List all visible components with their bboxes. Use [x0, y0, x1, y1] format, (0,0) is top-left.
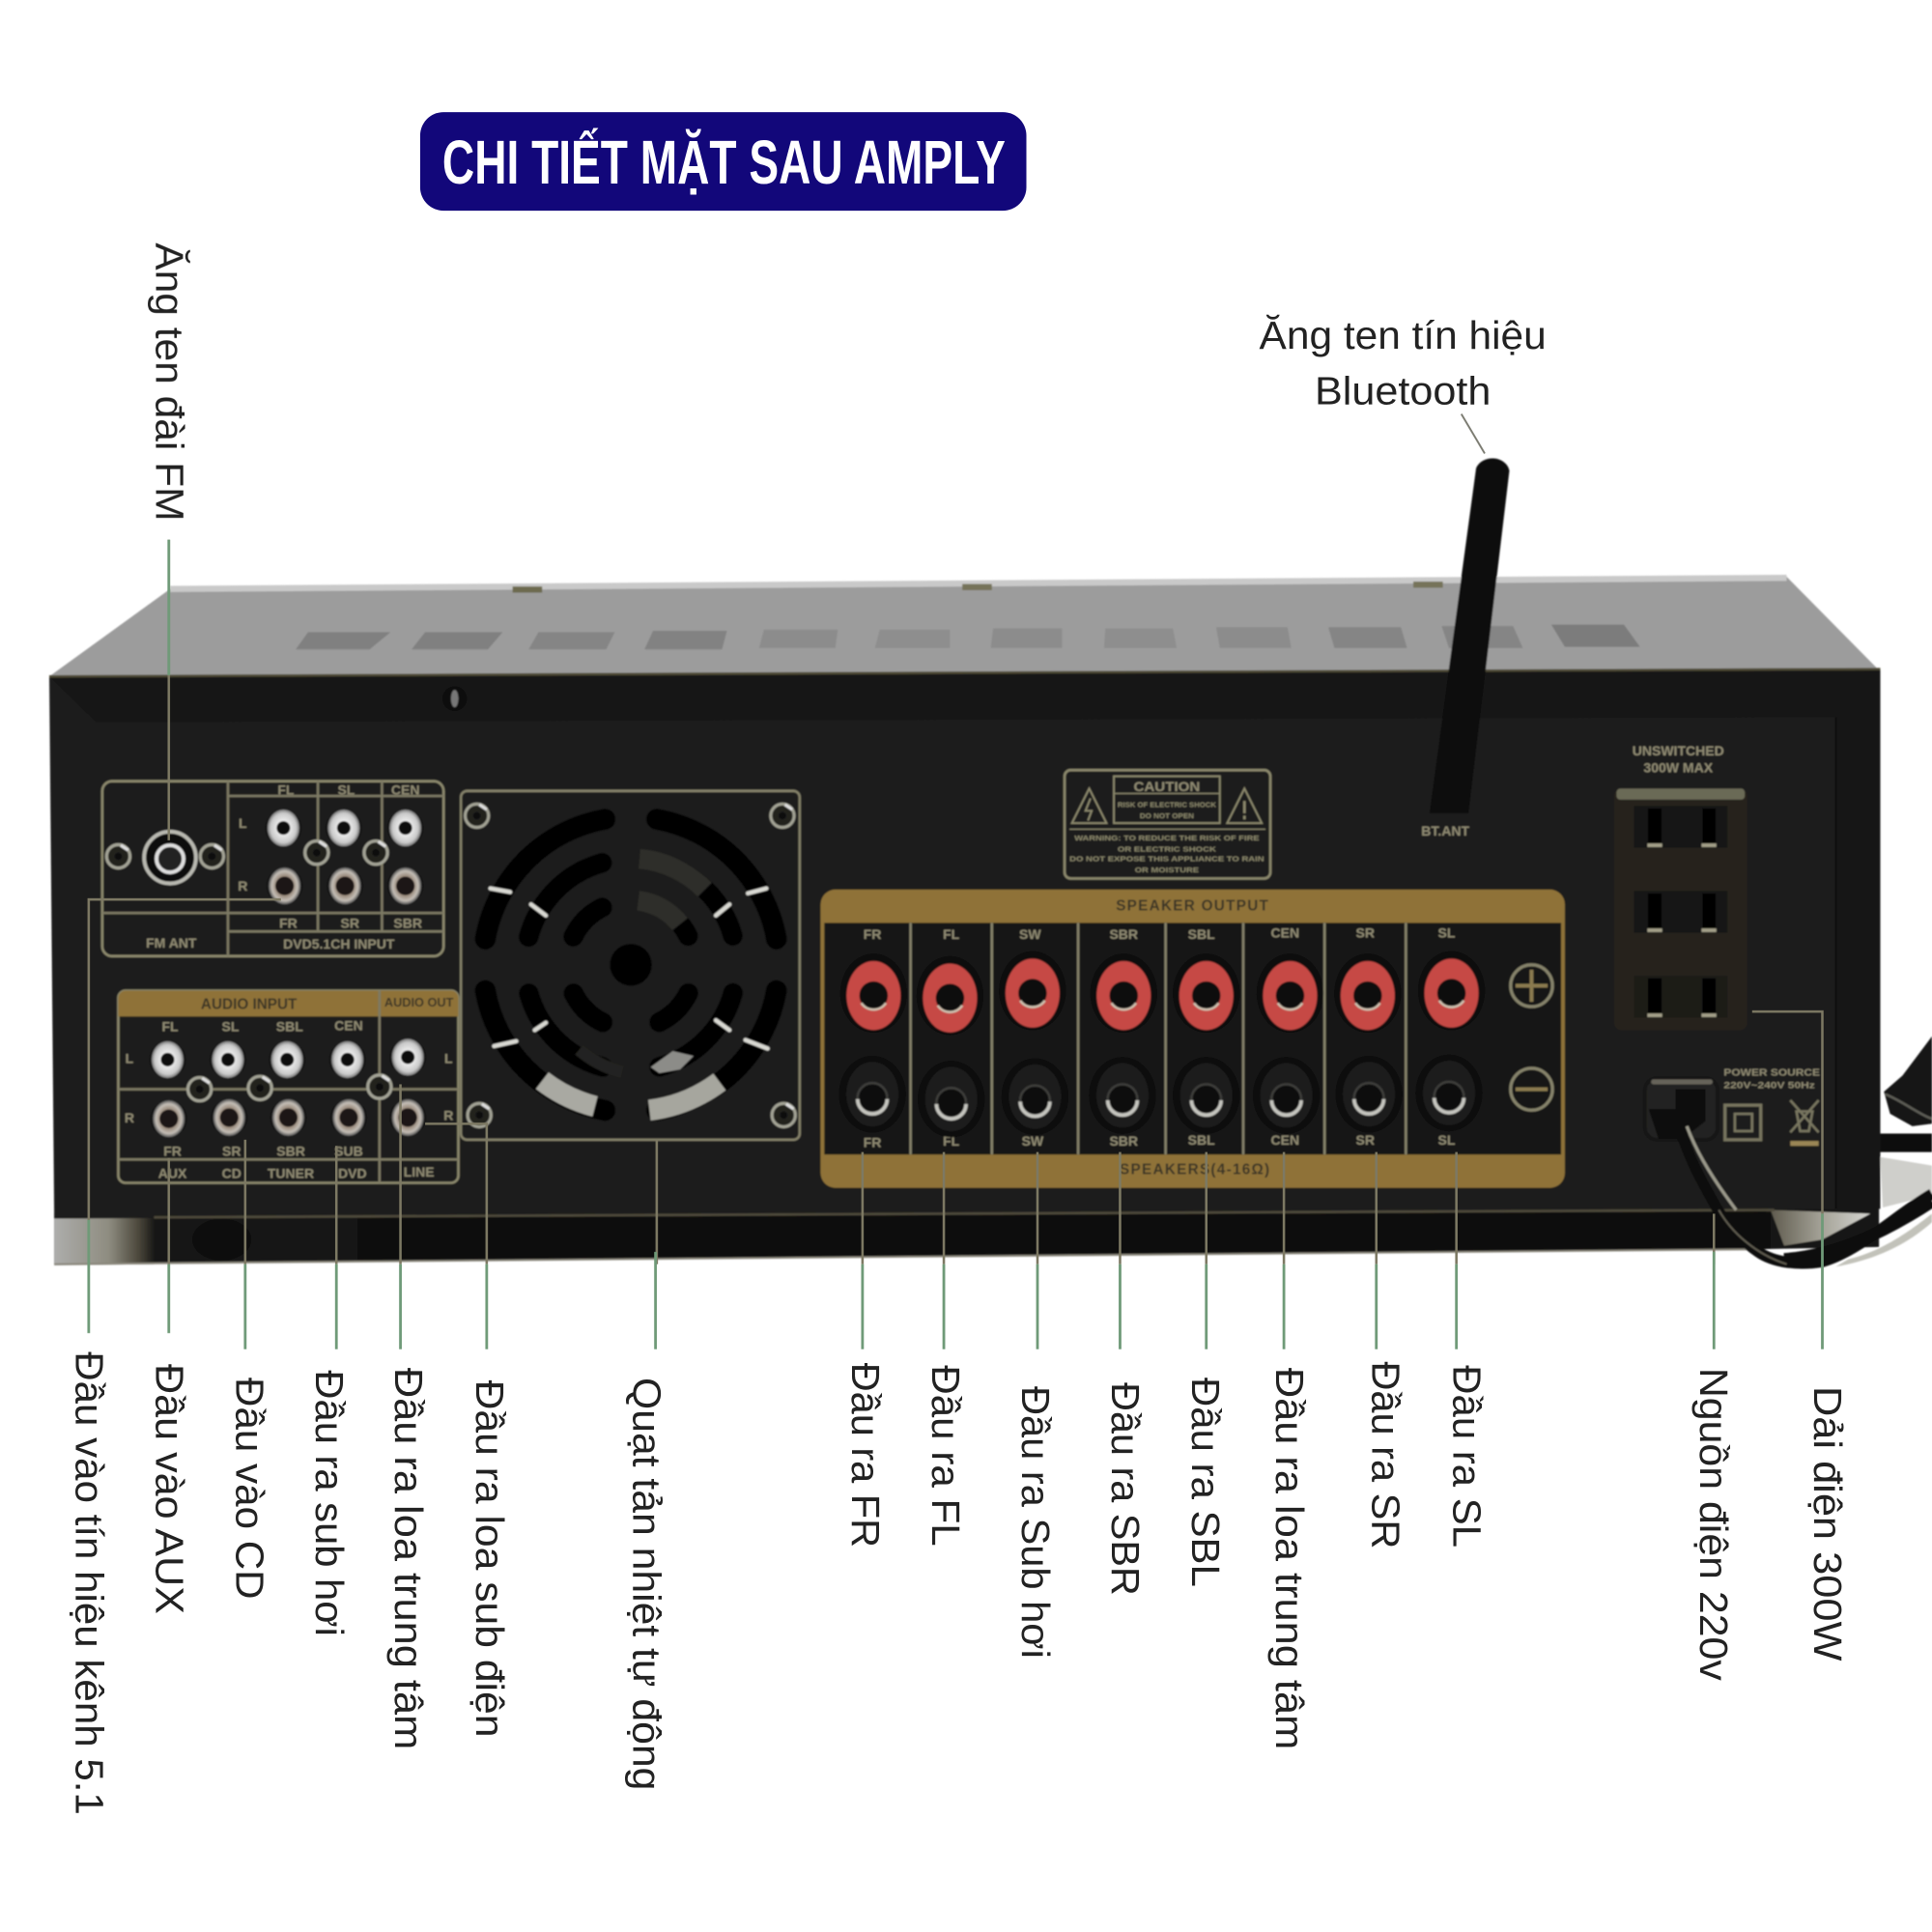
label: AUX input: Đầu vào AUX	[147, 1364, 191, 1614]
panel: DVD 5.1 input and FM antenna	[102, 781, 443, 956]
Bluetooth antenna	[1421, 458, 1509, 838]
icon: plus terminal	[1511, 965, 1552, 1007]
Bluetooth antenna: BT.ANT	[1421, 823, 1470, 838]
panel: speaker output: SBR	[1109, 926, 1138, 942]
panel: speaker output: SPEAKERS(4-16Ω)	[1120, 1162, 1270, 1179]
leader lines	[89, 414, 1822, 1350]
label: Bluetooth antenna	[1260, 313, 1547, 412]
panel: DVD 5.1 input and FM antenna: FL	[277, 782, 295, 798]
label: FM antenna: Ăng ten đài FM	[147, 242, 191, 522]
power inlet and markings: POWER SOURCE	[1723, 1068, 1820, 1079]
unswitched power strip	[1614, 743, 1747, 1030]
panel: speaker output: SW	[1022, 1133, 1044, 1149]
panel: audio input and audio out: DVD	[338, 1165, 367, 1180]
caution label: DO NOT EXPOSE THIS APPLIANCE TO RAIN	[1069, 857, 1264, 864]
panel: speaker output: SPEAKER OUTPUT	[1116, 898, 1269, 915]
panel: speaker output: SBR	[1109, 1133, 1138, 1149]
power inlet and markings	[1645, 1068, 1820, 1146]
label: powered sub output: Đầu ra loa sub điện	[468, 1380, 512, 1737]
label: Sub: Đầu ra Sub hơi	[1013, 1386, 1058, 1659]
panel: audio input and audio out: LINE	[404, 1164, 435, 1179]
panel: DVD 5.1 input and FM antenna: SR	[341, 915, 359, 930]
label: center output: Đầu ra loa trung tâm	[386, 1368, 431, 1749]
title badge: CHI TIẾT MẶT SAU AMPLY	[442, 128, 1006, 197]
panel: DVD 5.1 input and FM antenna: R	[238, 878, 247, 894]
panel: audio input and audio out: AUX	[158, 1165, 187, 1180]
panel: DVD 5.1 input and FM antenna: SL	[337, 782, 355, 798]
panel: speaker output: SR	[1356, 925, 1375, 941]
panel: speaker output: FL	[943, 926, 960, 942]
panel: speaker output: SR	[1356, 1132, 1375, 1148]
panel: speaker output: SBL	[1188, 1132, 1215, 1148]
panel: audio input and audio out: SBL	[276, 1019, 303, 1035]
panel: speaker output: SBL	[1188, 926, 1215, 942]
caution label: WARNING: TO REDUCE THE RISK OF FIRE	[1074, 836, 1260, 842]
panel: audio input and audio out: SL	[222, 1019, 240, 1035]
panel: DVD 5.1 input and FM antenna: SBR	[393, 915, 422, 930]
case screw	[442, 686, 467, 711]
panel: audio input and audio out: AUDIO OUT	[384, 995, 454, 1009]
panel: speaker output: SL	[1437, 1132, 1456, 1148]
amplifier rear panel	[49, 669, 1880, 1218]
panel: speaker output: FR	[864, 926, 881, 942]
panel: speaker output: CEN	[1271, 925, 1299, 941]
panel: audio input and audio out	[118, 991, 458, 1182]
label: center speaker: Đầu ra loa trung tâm	[1267, 1368, 1312, 1749]
power cord	[1678, 1037, 1932, 1266]
panel: audio input and audio out: L	[444, 1051, 453, 1066]
panel: speaker output: SL	[1437, 925, 1456, 941]
amplifier top cover	[49, 577, 1880, 676]
label: SR: Đầu ra SR	[1363, 1361, 1407, 1548]
panel: audio input and audio out: CD	[222, 1165, 242, 1180]
label: SBL: Đầu ra SBL	[1183, 1378, 1228, 1587]
panel: DVD 5.1 input and FM antenna: L	[239, 815, 247, 831]
caution label: DO NOT OPEN	[1140, 813, 1194, 820]
panel: audio input and audio out: R	[125, 1110, 134, 1125]
amplifier shadow and feet	[54, 1157, 1932, 1265]
title badge	[420, 112, 1026, 211]
panel: speaker output	[820, 890, 1565, 1188]
caution label: OR MOISTURE	[1135, 867, 1200, 874]
panel: audio input and audio out: SBR	[276, 1143, 305, 1158]
panel: audio input and audio out: SR	[222, 1143, 242, 1158]
panel: speaker output: FL	[943, 1133, 960, 1149]
label: SL: Đầu ra SL	[1444, 1365, 1489, 1548]
panel: DVD 5.1 input and FM antenna: FR	[279, 915, 298, 930]
unswitched power strip: 300W MAX	[1643, 760, 1714, 776]
caution label: OR ELECTRIC SHOCK	[1118, 846, 1216, 853]
panel: speaker output: SW	[1019, 926, 1041, 942]
panel: audio input and audio out: L	[126, 1051, 134, 1066]
label: sub output: Đầu ra sub hơi	[307, 1370, 352, 1636]
unswitched power strip: UNSWITCHED	[1633, 743, 1724, 758]
amplifier photo	[49, 458, 1932, 1266]
cooling fan grille	[461, 791, 800, 1140]
label: FL: Đầu ra FL	[923, 1365, 968, 1547]
power inlet and markings: 220V~240V 50Hz	[1723, 1080, 1816, 1090]
label: 300W strip: Dải điện 300W	[1805, 1386, 1850, 1662]
panel: audio input and audio out: FR	[163, 1143, 182, 1158]
panel: audio input and audio out: FL	[161, 1019, 179, 1035]
panel: audio input and audio out: AUDIO INPUT	[201, 997, 298, 1013]
panel: audio input and audio out: TUNER	[268, 1165, 314, 1180]
label: SBR: Đầu ra SBR	[1103, 1382, 1148, 1596]
label: FR: Đầu ra FR	[843, 1363, 888, 1548]
icon: minus terminal	[1511, 1068, 1552, 1110]
panel: DVD 5.1 input and FM antenna: FM ANT	[146, 935, 197, 951]
panel: speaker output: CEN	[1271, 1132, 1299, 1148]
caution label: RISK OF ELECTRIC SHOCK	[1118, 802, 1216, 809]
panel: DVD 5.1 input and FM antenna: CEN	[391, 782, 419, 798]
label: Bluetooth antenna: Ăng ten tín hiệu	[1260, 313, 1547, 357]
label: CD input: Đầu vào CD	[227, 1378, 271, 1600]
caution label	[1065, 770, 1270, 878]
panel: speaker output: FR	[864, 1134, 881, 1150]
label: power 220v: Nguồn điện 220v	[1691, 1368, 1736, 1681]
panel: audio input and audio out: R	[443, 1107, 453, 1122]
panel: DVD 5.1 input and FM antenna: DVD5.1CH INPUT	[283, 936, 395, 952]
label: 5.1 input: Đầu vào tín hiệu kênh 5.1	[67, 1351, 111, 1815]
panel: audio input and audio out: SUB	[334, 1143, 363, 1158]
caution label: CAUTION	[1133, 779, 1200, 794]
panel: audio input and audio out: CEN	[334, 1017, 363, 1033]
label: Bluetooth antenna: Bluetooth	[1315, 368, 1491, 412]
label: cooling fan: Quạt tản nhiệt tự động	[625, 1378, 669, 1790]
